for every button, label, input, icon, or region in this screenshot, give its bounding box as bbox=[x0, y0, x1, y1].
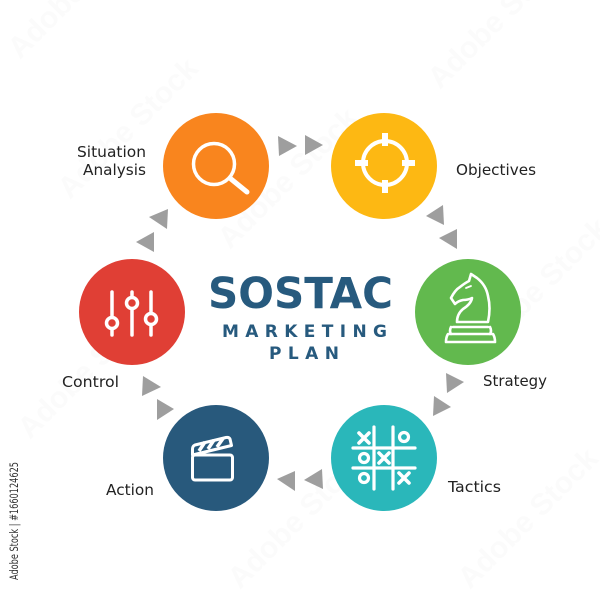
label: Control: Control bbox=[62, 373, 119, 391]
label: Strategy: Strategy bbox=[483, 372, 547, 390]
label: Situation Analysis: Situation bbox=[77, 143, 146, 161]
circle: Strategy with chess knight icon bbox=[415, 259, 521, 365]
circle: Control with sliders icon bbox=[79, 259, 185, 365]
arrows: Objectives to Strategy bbox=[426, 205, 457, 249]
label: Situation Analysis bbox=[77, 143, 146, 179]
stock credit: Adobe Stock | #1660124625 bbox=[7, 462, 21, 580]
arrows: Strategy to Tactics bbox=[433, 373, 464, 416]
watermark pattern: Adobe Stock bbox=[12, 292, 165, 445]
arrows: Tactics to Action bbox=[277, 469, 323, 491]
label: Situation Analysis: Analysis bbox=[83, 161, 146, 179]
watermark pattern: Adobe Stock bbox=[52, 52, 205, 205]
subtitle: Marketing Plan: PLAN bbox=[269, 344, 339, 364]
subtitle: Marketing Plan bbox=[222, 322, 387, 364]
label: Action: Action bbox=[106, 481, 154, 499]
watermark pattern: Adobe Stock bbox=[212, 102, 365, 255]
subtitle: Marketing Plan: MARKETING bbox=[222, 322, 387, 342]
watermark pattern: Adobe Stock bbox=[222, 442, 375, 595]
arrows: Situation Analysis to Objectives bbox=[278, 135, 323, 156]
title: SOSTAC: SOSTAC bbox=[208, 270, 393, 319]
arrows: Control to Situation Analysis bbox=[136, 209, 168, 252]
circle: Tactics with tic-tac-toe icon bbox=[331, 405, 437, 511]
circle: Situation Analysis with magnifier icon bbox=[163, 113, 269, 219]
label: Objectives: Objectives bbox=[456, 161, 536, 179]
label: Tactics: Tactics bbox=[447, 478, 501, 496]
circle: Objectives with target icon bbox=[331, 113, 437, 219]
circle: Action with clapperboard icon bbox=[163, 405, 269, 511]
arrows: Action to Control bbox=[142, 376, 174, 420]
